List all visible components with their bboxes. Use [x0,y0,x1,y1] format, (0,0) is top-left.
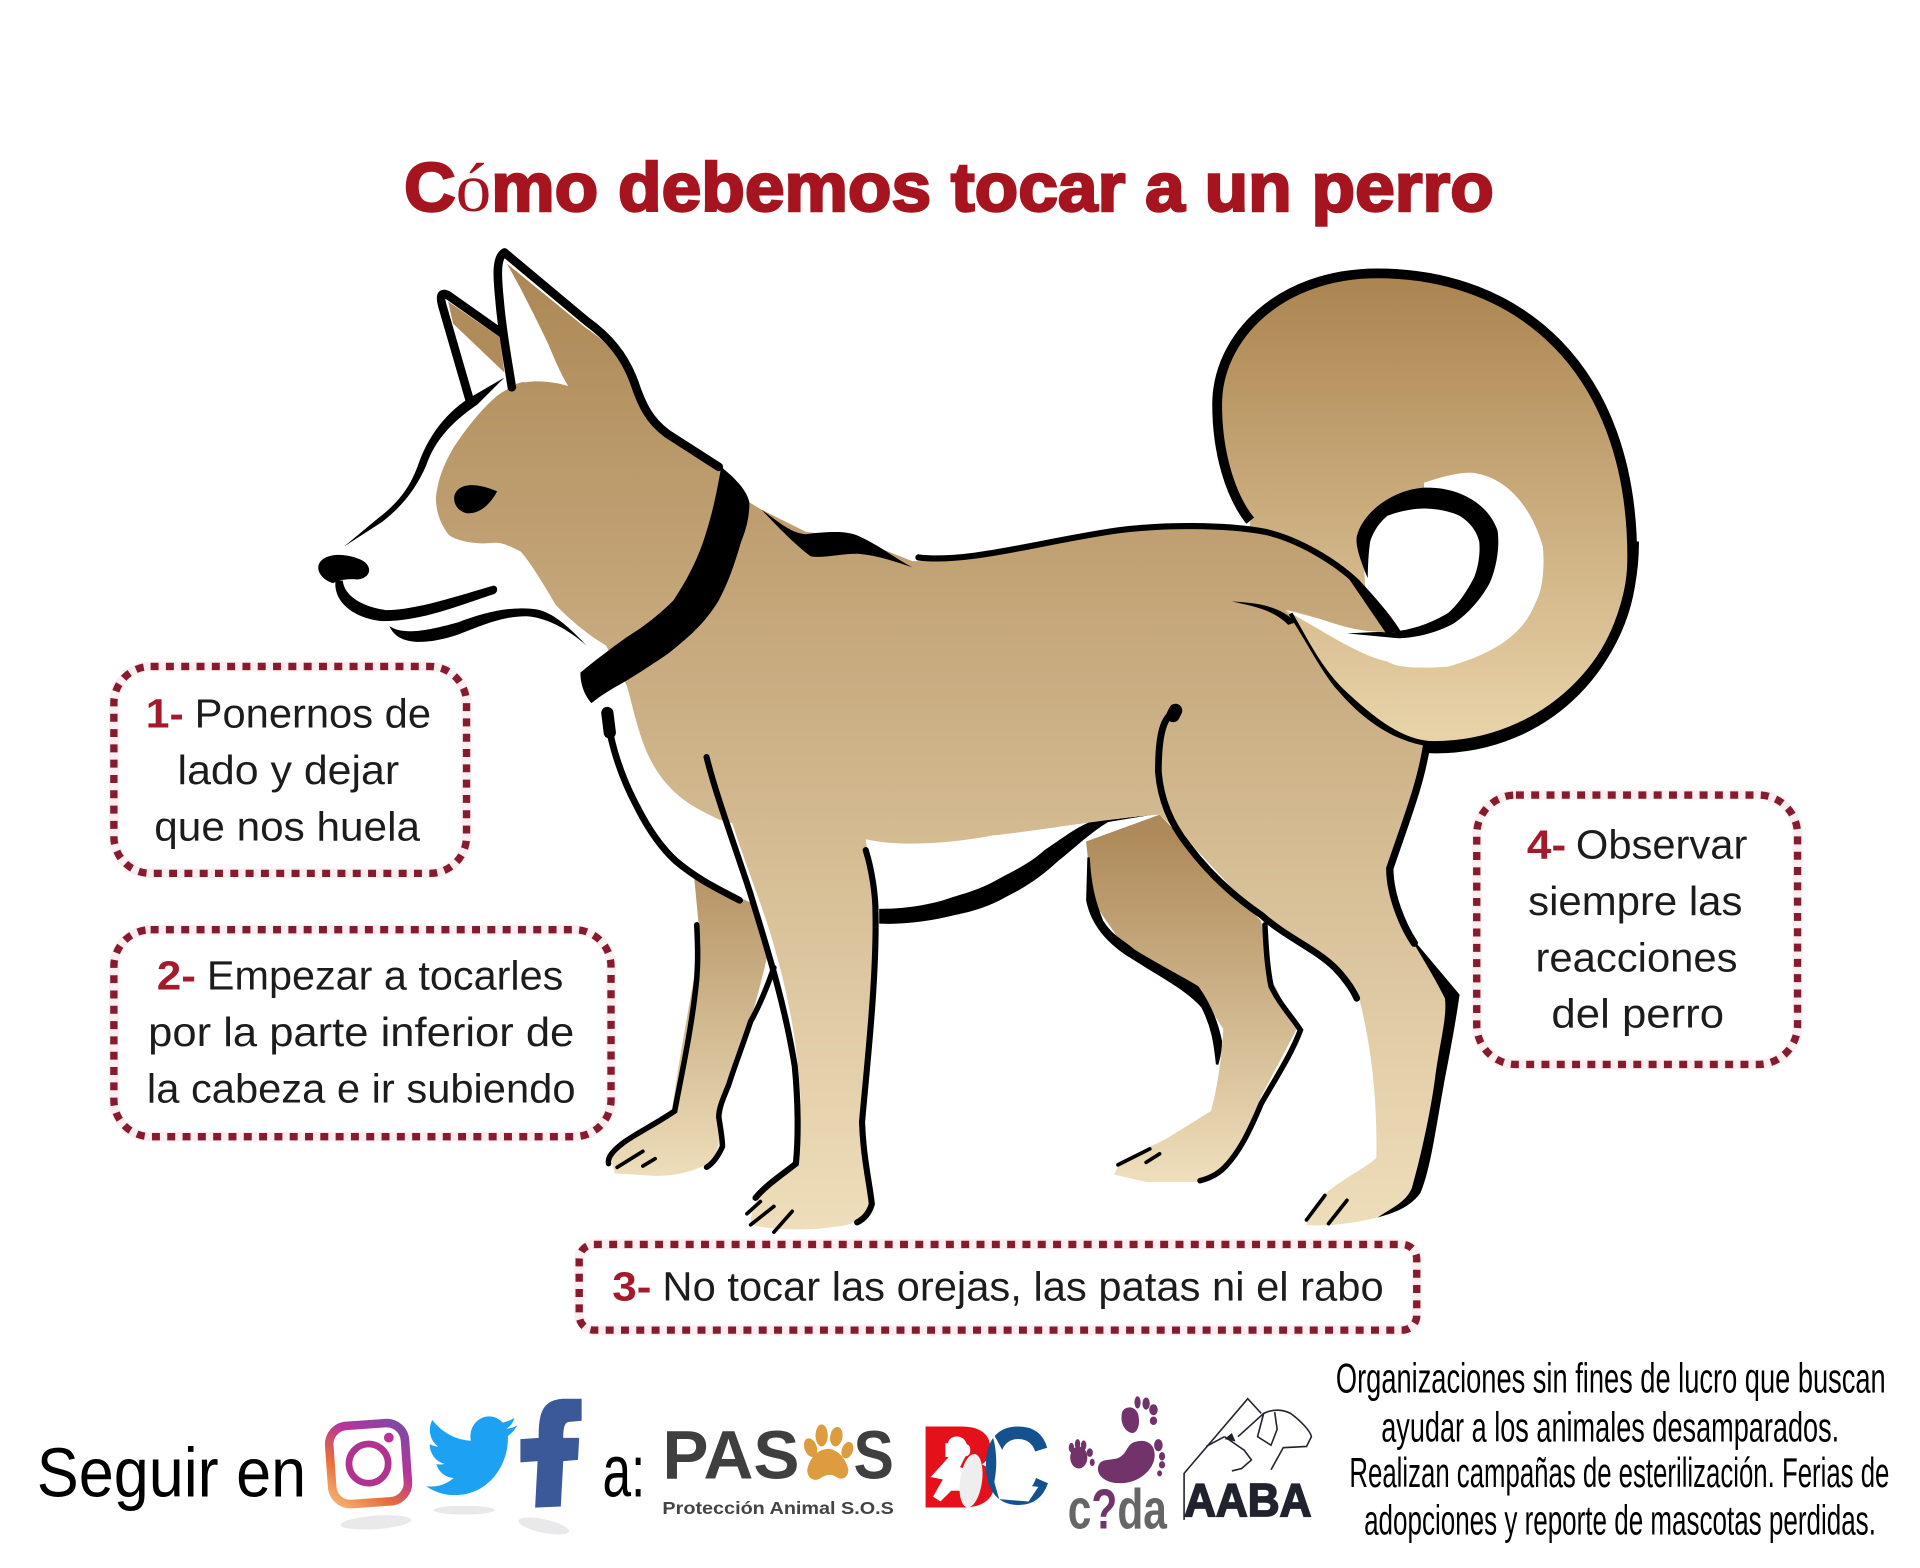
dog outline strokes [607,526,1427,1222]
logo: pasos: S [853,1416,894,1493]
callout 4: del perro [1551,991,1724,1037]
callout 1: lado y dejar [178,747,399,793]
callout 4 [1477,795,1798,1064]
logo: pasos [662,1416,894,1518]
dog rump line [1232,576,1401,633]
callout 3: 3- [612,1264,651,1310]
follow text: Seguir en [37,1434,306,1512]
logo: aaba [1184,1399,1311,1526]
dog jaw [389,608,587,646]
dog eye [454,485,497,513]
logo: aaba: AABA [1184,1474,1311,1526]
dog rear knee [1378,933,1460,1217]
callout 3: No tocar las orejas, las patas ni el rabo [662,1264,1384,1310]
dog nose [318,555,369,583]
callout 2: la cabeza e ir subiendo [147,1065,576,1111]
callout 1: Ponernos de [195,691,431,737]
icon: facebook [517,1399,582,1538]
dog neck wedge [762,510,912,567]
callout 1: 1- [146,691,184,737]
dog tail [1217,273,1634,748]
logo: bc: B [921,1406,997,1529]
dog near ear outline [498,253,719,467]
callout 1 [114,666,467,873]
callout 4: siempre las [1528,878,1742,924]
callout 2: 2- [157,953,196,999]
logo: coda: c?da [1068,1477,1167,1540]
organizations description [1336,1355,1889,1544]
colon text: a: [602,1430,645,1513]
callout 4: 4- [1527,822,1566,868]
dog far front leg [608,878,774,1176]
dog collar [580,467,749,703]
dog forehead line [344,377,504,546]
callout 3 [579,1244,1417,1330]
callout 2 [114,930,611,1137]
dog body and head [436,264,1460,1229]
dog claws [617,1149,1347,1232]
logo: coda [1068,1396,1167,1540]
icon: twitter [426,1416,517,1515]
callout 2: Empezar a tocarles [207,953,563,999]
dog far ear [441,294,504,402]
callout 1: que nos huela [154,803,421,849]
dog illustration [318,253,1634,1232]
dog belly line [879,815,1153,924]
callout 2: por la parte inferior de [148,1009,574,1055]
title: Cómo debemos tocar a un perro [404,149,1494,226]
callout 4: reacciones [1536,934,1738,980]
dog far rear leg [1086,815,1300,1182]
icon: instagram [328,1422,412,1532]
logo: bc [921,1405,1051,1529]
dog mouth [335,581,497,621]
logo: pasos: PAS [662,1416,800,1493]
callout 4: Observar [1576,822,1747,868]
logo: bc: C [982,1405,1051,1528]
logo: pasos: Protección Animal S.O.S [662,1498,894,1518]
